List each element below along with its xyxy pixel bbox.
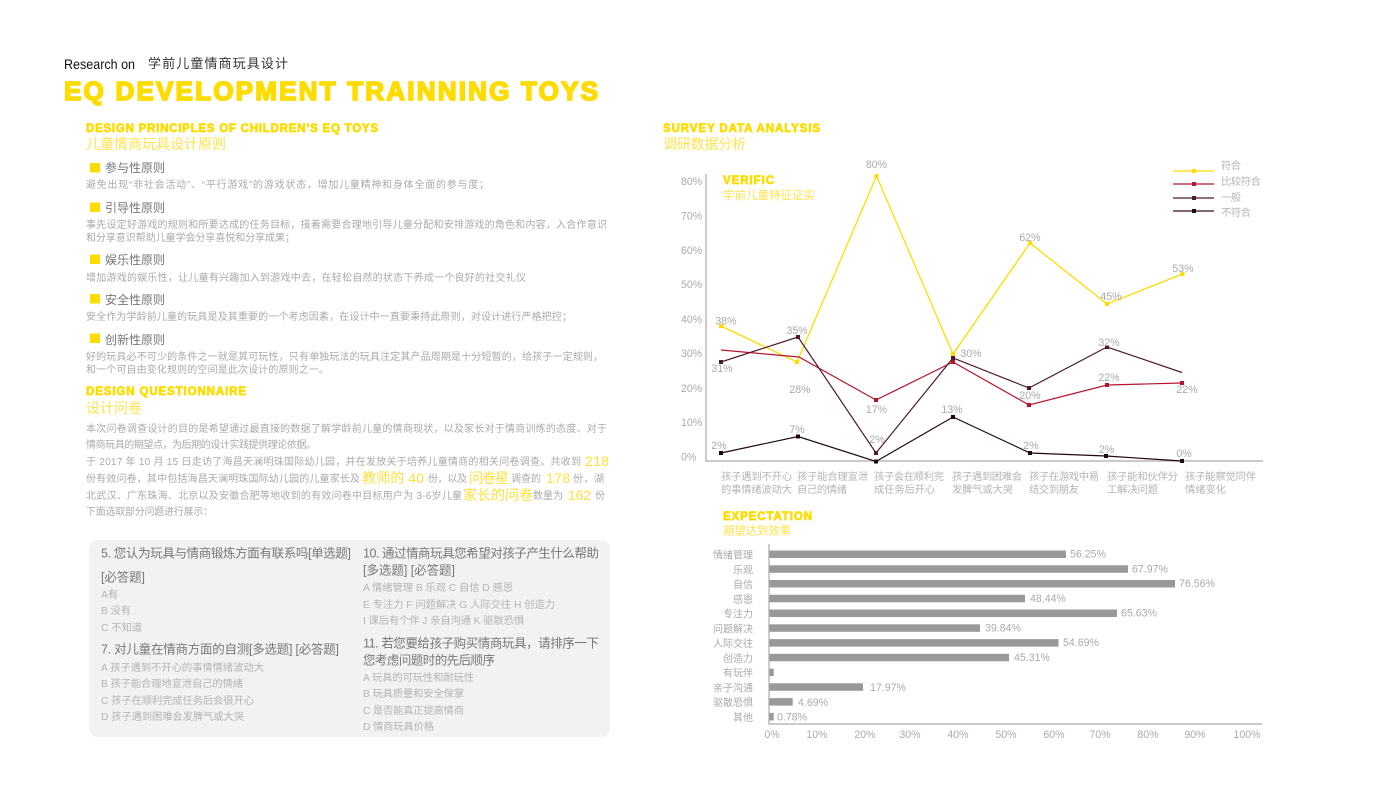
x axis labels: 80% <box>1137 729 1159 741</box>
question 11 <box>363 636 599 733</box>
x axis labels: 10% <box>806 729 828 741</box>
value labels: 65.63% <box>1121 608 1158 620</box>
principle: safety: 安全作为学龄前儿童的玩具是及其重要的一个考虑因素，在设计中一直要秉持此原则，对设计进行严格把控； <box>86 310 572 323</box>
data labels: 2% <box>1023 440 1039 452</box>
category labels: 其他 <box>733 711 753 724</box>
y axis labels: 0% <box>681 452 697 464</box>
question 5: C 不知道 <box>101 621 142 634</box>
y axis labels: 30% <box>681 348 703 360</box>
series: 符合 <box>719 174 1184 364</box>
category labels: 人际交往 <box>713 637 753 650</box>
category labels: 情绪管理 <box>713 548 753 562</box>
principle: entertainment: 娱乐性原则 <box>105 253 165 267</box>
x axis labels: 自己的情绪 <box>797 483 847 496</box>
x axis labels: 60% <box>1043 729 1065 741</box>
principle: safety: 安全性原则 <box>105 292 165 307</box>
x axis labels: 孩子能合理宣泄 <box>797 470 868 483</box>
category labels: 亲子沟通 <box>713 681 753 694</box>
x axis labels: 0% <box>764 729 780 741</box>
text block: questionnaire description: 北武汉、广东珠海、北京以及安徽合肥等地收到的有效问卷中目标用户为 3-6岁儿童 <box>86 489 462 502</box>
x axis labels <box>721 470 1256 496</box>
data labels: 31% <box>711 363 733 375</box>
question 7: C 孩子在顺利完成任务后会很开心 <box>101 694 254 707</box>
question 11: D 情商玩具价格 <box>363 720 435 733</box>
text block: questionnaire description: 下面选取部分问题进行展示： <box>86 505 213 518</box>
value labels: 17.97% <box>870 682 907 694</box>
y axis labels: 40% <box>681 314 703 326</box>
panel: sample questions <box>89 540 610 737</box>
data labels: 2% <box>869 434 885 446</box>
text block: questionnaire description: 218 <box>585 453 609 469</box>
x axis labels: 工解决问题 <box>1107 483 1158 496</box>
principle: guidance <box>86 201 607 244</box>
y axis labels: 70% <box>681 210 703 222</box>
value labels: 45.31% <box>1014 652 1051 664</box>
value labels: 76.56% <box>1179 578 1216 590</box>
text block: questionnaire description: 178 <box>546 470 570 486</box>
text block: questionnaire description: 份 <box>595 490 605 502</box>
data labels: 0% <box>1176 448 1192 460</box>
line chart: verific <box>681 159 1263 496</box>
question 5: [必答题] <box>101 570 145 584</box>
text block: questionnaire description: 数量为 <box>533 489 563 502</box>
legend: 一般 <box>1221 191 1241 204</box>
question 10: A 情绪管理 B 乐观 C 自信 D 感恩 <box>363 581 513 594</box>
legend <box>1173 159 1261 219</box>
data labels: 13% <box>941 404 963 416</box>
category labels: 乐观 <box>733 564 753 576</box>
data labels: 28% <box>789 384 811 396</box>
heading: survey data analysis: 调研数据分析 <box>663 136 746 152</box>
value labels: 4.69% <box>798 697 829 709</box>
panel: design principles <box>86 123 607 376</box>
chart heading: 学前儿童特征证实 <box>723 188 815 202</box>
principle: innovation: 好的玩具必不可少的条件之一就是其可玩性，只有单独玩法的玩具注定其产品周期是十分短暂的，给孩子一定规则， <box>86 350 603 363</box>
category labels: 有玩伴 <box>723 667 753 680</box>
data labels: 32% <box>1098 337 1120 349</box>
y axis labels <box>681 176 703 464</box>
value labels <box>777 548 1216 724</box>
principle: guidance: 事先设定好游戏的规则和所要达成的任务目标，接着需要合理地引导儿童分配和安排游戏的角色和内容，入合作意识 <box>86 218 607 231</box>
legend: 符合 <box>1221 159 1241 172</box>
heading: design principles <box>86 123 378 152</box>
heading: design principles: 儿童情商玩具设计原则 <box>86 136 226 152</box>
value labels: 48.44% <box>1030 593 1067 605</box>
question 11: 您考虑问题时的先后顺序 <box>363 652 495 668</box>
question 11: 11. 若您要给孩子购买情商玩具，请排序一下 <box>363 636 599 650</box>
x axis labels: 成任务后开心 <box>874 483 935 496</box>
header: research line: 学前儿童情商玩具设计 <box>148 56 288 71</box>
x axis labels: 孩子会在顺利完 <box>874 470 944 483</box>
text block: questionnaire description: 本次问卷调查设计的目的是希望通过最直接的数据了解学龄前儿童的情商现状，以及家长对于情商训练的态度、对于 <box>86 422 607 435</box>
text block: questionnaire description: 调查的 <box>511 472 541 485</box>
question 7: D 孩子遇到困难会发脾气或大哭 <box>101 710 244 723</box>
x axis labels: 孩子能察觉同伴 <box>1185 470 1256 483</box>
x axis labels: 孩子遇到不开心 <box>721 470 792 483</box>
question 7: 7. 对儿童在情商方面的自测[多选题] [必答题] <box>101 642 339 656</box>
x axis labels: 40% <box>947 729 969 741</box>
principle: guidance: 和分享意识帮助儿童学会分享喜悦和分享成果； <box>86 231 295 244</box>
category labels: 专注力 <box>723 608 753 620</box>
principle: entertainment: 增加游戏的娱乐性，让儿童有兴趣加入到游戏中去，在轻松自然的状态下养成一个良好的社交礼仪 <box>86 271 526 284</box>
data labels: 62% <box>1019 232 1041 244</box>
data labels: 35% <box>786 325 808 337</box>
question 11: B 玩具质量和安全保掌 <box>363 687 464 700</box>
text block: questionnaire description: 162 <box>568 487 591 503</box>
x axis labels: 50% <box>995 729 1017 741</box>
axes <box>769 544 1262 724</box>
x axis labels: 孩子能和伙伴分 <box>1107 470 1178 483</box>
text block: questionnaire description: 份有效问卷，其中包括海昌天澜明珠国际幼儿园的儿童家长及 <box>86 472 360 485</box>
x axis labels: 70% <box>1089 729 1111 741</box>
data labels <box>711 159 1198 460</box>
principle: innovation: 创新性原则 <box>105 332 165 347</box>
data labels: 2% <box>1099 444 1115 456</box>
category labels: 自信 <box>733 578 753 591</box>
chart heading: VERIFIC <box>723 175 774 187</box>
y axis labels: 10% <box>681 417 703 429</box>
x axis labels: 100% <box>1233 729 1261 741</box>
x axis labels: 发脾气或大哭 <box>952 483 1013 496</box>
question 7: A 孩子遇到不开心的事情情绪波动大 <box>101 661 264 674</box>
value labels: 54.69% <box>1063 637 1100 649</box>
value labels: 39.84% <box>985 622 1022 634</box>
value labels: 56.25% <box>1070 548 1107 560</box>
category labels: 创造力 <box>723 652 753 665</box>
principle: participation: 避免出现“非社会活动”、“平行游戏”的游戏状态，增加儿童精神和身体全面的参与度； <box>86 178 489 191</box>
principle: participation: 参与性原则 <box>105 160 165 175</box>
text block: questionnaire description: 问卷星 <box>469 470 509 486</box>
x axis labels: 的事情绪波动大 <box>721 483 792 496</box>
principle: participation <box>86 160 489 191</box>
question 10 <box>363 546 599 627</box>
principle: guidance: 引导性原则 <box>105 201 165 215</box>
title: EQ DEVELOPMENT TRAINNING TOYS <box>64 76 598 106</box>
question 10: [多选题] [必答题] <box>363 562 455 578</box>
question 5: 5. 您认为玩具与情商锻炼方面有联系吗[单选题] <box>101 546 351 560</box>
chart heading <box>723 511 812 538</box>
x axis labels: 90% <box>1184 729 1206 741</box>
data labels: 2% <box>711 440 727 452</box>
principle: innovation: 和一个可自由变化规则的空间是此次设计的原则之一。 <box>86 363 329 376</box>
axes <box>706 174 1263 461</box>
data labels: 20% <box>1019 390 1041 402</box>
x axis labels: 30% <box>899 729 921 741</box>
question 10: E 专注力 F 问题解决 G 人际交往 H 创造力 <box>363 598 555 611</box>
bars <box>769 550 1175 720</box>
data labels: 22% <box>1098 372 1120 384</box>
x axis labels: 结交到朋友 <box>1029 483 1079 496</box>
value labels: 0.78% <box>777 712 808 724</box>
y axis labels: 50% <box>681 279 703 291</box>
data labels: 80% <box>866 159 888 171</box>
data labels: 53% <box>1172 263 1194 275</box>
header: research line: Research on <box>64 56 135 72</box>
legend: 比较符合 <box>1221 175 1261 188</box>
y axis labels: 80% <box>681 176 703 188</box>
text block: questionnaire description: 份，以及 <box>428 473 467 485</box>
category labels: 感恩 <box>733 593 753 606</box>
data labels: 45% <box>1100 291 1122 303</box>
question 11: C 是否能真正提高情商 <box>363 704 464 717</box>
data labels: 22% <box>1176 384 1198 396</box>
bar chart: expectation <box>713 511 1262 741</box>
heading: design questionnaire <box>86 386 246 416</box>
text block: questionnaire description: 份，湖 <box>573 473 604 485</box>
text block: questionnaire description: 教师的 40 <box>362 470 424 486</box>
x axis labels <box>764 729 1261 741</box>
text block: questionnaire description: 情商玩具的期望点，为后期的设计实践提供理论依据。 <box>86 438 316 451</box>
heading: survey data analysis <box>663 123 820 152</box>
data labels: 38% <box>715 316 737 328</box>
principle: innovation <box>86 332 603 376</box>
heading: design questionnaire: DESIGN QUESTIONNAIRE <box>86 386 246 398</box>
category labels: 问题解决 <box>713 622 753 635</box>
question 5: B 没有 <box>101 604 131 617</box>
y axis labels: 20% <box>681 383 703 395</box>
chart heading <box>723 175 815 202</box>
question 10: 10. 通过情商玩具您希望对孩子产生什么帮助 <box>363 546 599 560</box>
panel: design questionnaire <box>86 386 609 518</box>
category labels: 驱散恐惧 <box>713 696 753 709</box>
header: research line <box>64 56 288 72</box>
heading: design questionnaire: 设计问卷 <box>86 400 142 416</box>
series: 比较符合 <box>721 350 1184 407</box>
series: 不符合 <box>719 415 1184 464</box>
data labels: 17% <box>866 404 888 416</box>
heading: design principles: DESIGN PRINCIPLES OF CHILDREN’S EQ TOYS <box>86 123 378 135</box>
question 5: A 有 <box>101 588 118 601</box>
text block: questionnaire description: 于 2017 年 10 月 15 日走访了海昌天澜明珠国际幼儿园，并在发放关于培养儿童情商的相关问卷调查。共收到 <box>86 455 581 468</box>
series: 一般 <box>719 335 1182 455</box>
heading: survey data analysis: SURVEY DATA ANALYSIS <box>663 123 820 135</box>
principle: entertainment <box>86 253 526 284</box>
question 5 <box>101 546 351 634</box>
chart heading: EXPECTATION <box>723 511 812 523</box>
value labels: 67.97% <box>1132 563 1169 575</box>
y axis labels: 60% <box>681 245 703 257</box>
x axis labels: 孩子遇到困难会 <box>952 470 1022 483</box>
question 10: I 课后有个伴 J 亲自沟通 K 驱散恐惧 <box>363 614 524 627</box>
text block: questionnaire description: 家长的问卷 <box>463 487 533 503</box>
question 11: A 玩具的可玩性和耐玩性 <box>363 671 474 684</box>
category labels <box>713 548 753 724</box>
text block: questionnaire description <box>86 422 609 518</box>
data labels: 30% <box>960 348 982 360</box>
x axis labels: 孩子在游戏中易 <box>1029 470 1099 483</box>
legend: 不符合 <box>1221 206 1251 219</box>
question 7: B 孩子能合理地宣泄自己的情绪 <box>101 677 243 690</box>
question 7 <box>101 642 339 723</box>
chart heading: 期望达到效果 <box>723 524 792 538</box>
data labels: 7% <box>789 424 805 436</box>
x axis labels: 情绪变化 <box>1185 483 1226 496</box>
principle: safety <box>86 292 572 323</box>
x axis labels: 20% <box>854 729 876 741</box>
